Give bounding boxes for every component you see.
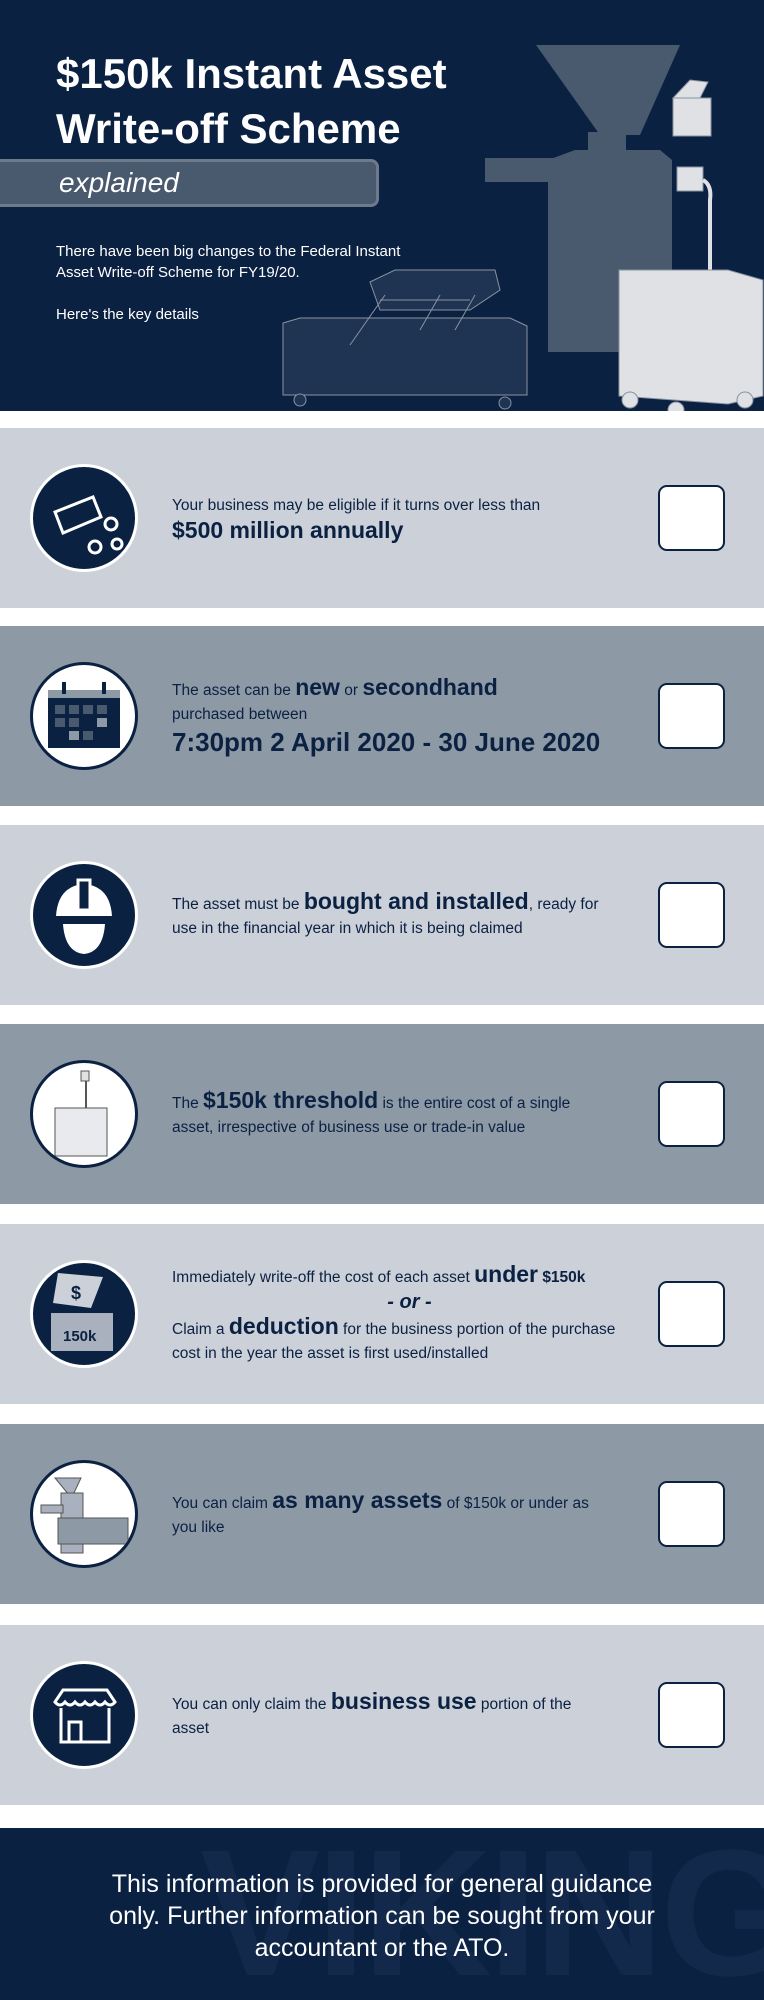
checkbox [658, 1682, 725, 1748]
text: The $150k threshold is the entire cost of a single asset, irrespective of business use or trade-in value [172, 1087, 570, 1136]
text: Claim a deduction for the business portion of the purchase cost in the year the asset is first used/installed [172, 1313, 615, 1362]
text: - or - [387, 1291, 432, 1313]
panel: bought and installed [0, 825, 764, 1005]
panel: business use [0, 1625, 764, 1805]
checkbox [658, 683, 725, 749]
text [172, 497, 540, 543]
disclaimer text: This information is provided for general guidance [112, 1870, 652, 1898]
icon: box 150k: 150k [63, 1328, 97, 1345]
title: $150k Instant Asset [56, 50, 447, 97]
disclaimer text: accountant or the ATO. [255, 1934, 509, 1962]
hero banner [0, 0, 764, 411]
checkbox [658, 1081, 725, 1147]
intro text: Here's the key details [56, 306, 199, 323]
icon: calendar [30, 662, 138, 770]
icon: hard hat worker [30, 861, 138, 969]
illustration: machines [282, 45, 764, 411]
icon: box 150k: $ [71, 1283, 81, 1303]
text: $500 million annually [172, 517, 403, 543]
text: The asset can be new or secondhand [172, 674, 498, 700]
checkbox [658, 882, 725, 948]
checkbox [658, 1281, 725, 1347]
intro text [56, 243, 400, 323]
text: The asset must be bought and installed, ready for use in the financial year in which it is being claimed [172, 888, 598, 937]
subtitle bar: explained [0, 159, 379, 207]
icon: shop [30, 1661, 138, 1769]
disclaimer text [109, 1870, 655, 1962]
panel: new or secondhand [0, 626, 764, 806]
disclaimer text: only. Further information can be sought from your [109, 1902, 655, 1930]
subtitle bar: explained: explained [59, 167, 179, 198]
text: 7:30pm 2 April 2020 - 30 June 2020 [172, 727, 600, 757]
checkbox [658, 1481, 725, 1547]
intro text: There have been big changes to the Federal Instant Asset Write-off Scheme for FY19/20. [56, 243, 400, 281]
text [172, 1261, 615, 1362]
title [56, 50, 447, 152]
text: You can claim as many assets of $150k or under as you like [172, 1487, 589, 1536]
title: Write-off Scheme [56, 105, 401, 152]
panel: threshold [0, 1024, 764, 1204]
text [172, 674, 600, 757]
panel: turnover [0, 428, 764, 608]
panel: write-off or deduction [0, 1224, 764, 1404]
panel: as many assets [0, 1424, 764, 1604]
icon: machines [30, 1460, 138, 1568]
icon: money [30, 464, 138, 572]
text: Your business may be eligible if it turns over less than [172, 497, 540, 514]
text: purchased between [172, 706, 307, 723]
text: Immediately write-off the cost of each asset under $150k [172, 1261, 585, 1287]
icon: box 150k [30, 1260, 138, 1368]
icon: cart [30, 1060, 138, 1168]
footer disclaimer [0, 1828, 764, 2000]
checkbox [658, 485, 725, 551]
text: You can only claim the business use portion of the asset [172, 1688, 571, 1737]
